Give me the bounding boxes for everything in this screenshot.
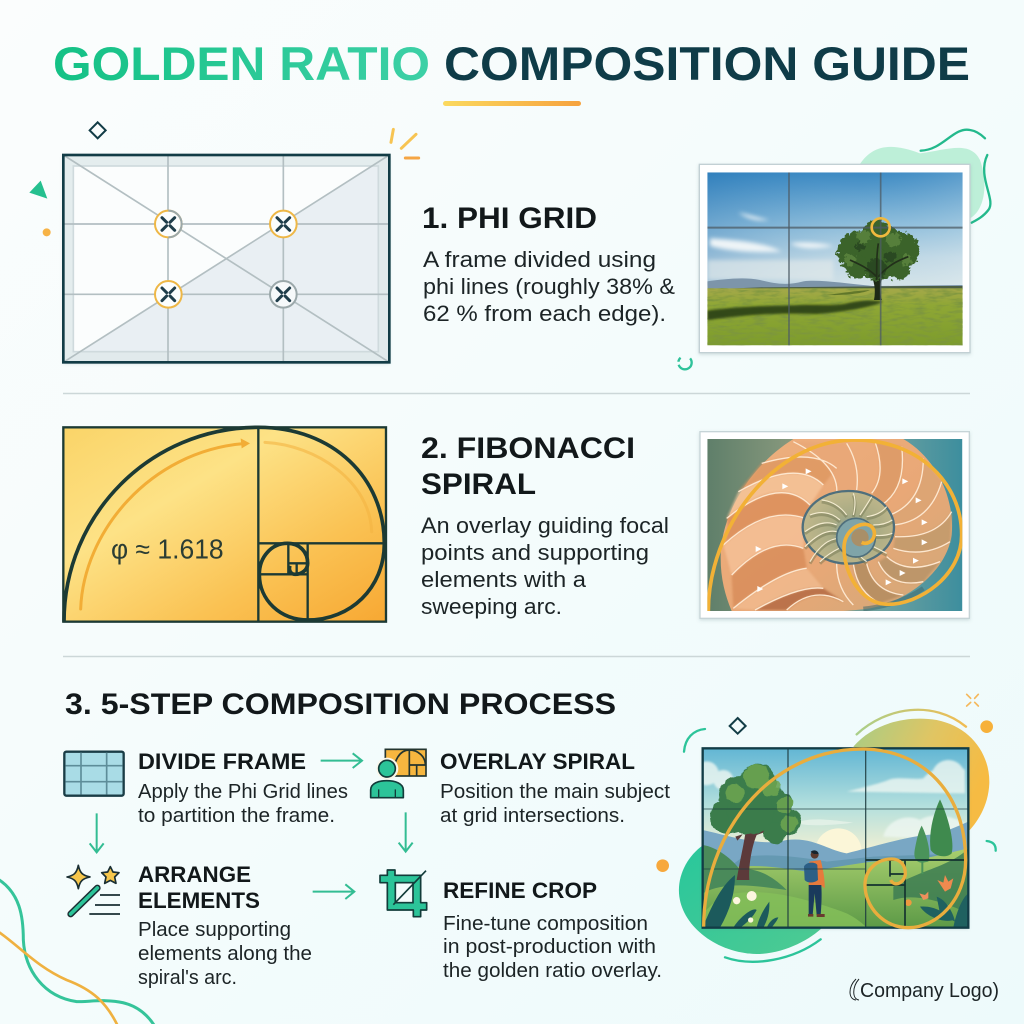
cypress trees (914, 799, 952, 874)
yellow blob (853, 719, 989, 833)
panel: illustrated landscape with spiral (656, 694, 996, 962)
grid squares (258, 427, 386, 622)
intersection marker: bottom right (270, 281, 297, 308)
text block: fibonacci spiral (421, 432, 669, 619)
text block: fibonacci spiral: elements with a (421, 567, 587, 592)
heading: process: 3. 5-STEP COMPOSITION PROCESS (65, 688, 616, 721)
foreground plants (703, 875, 968, 928)
icon: magic wand (67, 865, 120, 914)
panel: phi grid diagram (63, 155, 389, 362)
step: arrange elements (138, 862, 312, 989)
golden spiral overlay (708, 440, 962, 611)
step: arrange elements: elements along the (138, 943, 312, 965)
panel: nautilus photo with spiral (700, 432, 969, 618)
spiral overlay (704, 749, 966, 928)
arrow: divide to overlay (321, 753, 362, 768)
arrow: arrange to refine (313, 884, 354, 899)
step: refine crop (443, 878, 662, 982)
decorative curves: bottom left (0, 879, 154, 1024)
step: divide frame (138, 749, 348, 827)
step: arrange elements: ARRANGE (138, 862, 251, 887)
step: refine crop: REFINE CROP (443, 878, 597, 903)
step: arrange elements: Place supporting (138, 919, 291, 941)
green blob (679, 845, 823, 954)
step: overlay spiral (440, 749, 670, 827)
step: overlay spiral: at grid intersections. (440, 805, 625, 827)
title underline (443, 101, 581, 106)
spiral (64, 427, 384, 622)
panel: landscape photo with phi grid (676, 130, 990, 372)
tree (837, 219, 919, 300)
inner arcs (81, 438, 372, 609)
text block: fibonacci spiral: sweeping arc. (421, 594, 562, 619)
arrow: divide to arrange (90, 813, 104, 852)
icon: crop (380, 870, 427, 917)
step: refine crop: Fine-tune composition (443, 913, 648, 935)
intersection marker: top right (270, 211, 297, 237)
text block: phi grid (422, 202, 675, 326)
text block: phi grid: 62 % from each edge). (423, 301, 666, 326)
title: GOLDEN RATIO (53, 37, 430, 90)
panel: fibonacci spiral diagram (63, 427, 386, 622)
mint blob and curves (859, 130, 990, 223)
text block: fibonacci spiral: points and supporting (421, 540, 649, 565)
company logo: Company Logo) (860, 980, 999, 1002)
icon: spiral and person (371, 749, 426, 798)
step: arrange elements: spiral's arc. (138, 967, 237, 989)
person (804, 850, 825, 917)
step: refine crop: the golden ratio overlay. (443, 960, 662, 982)
tree (710, 764, 801, 880)
title: COMPOSITION GUIDE (444, 37, 970, 90)
text block: phi grid: 1. PHI GRID (422, 202, 597, 235)
text block: phi grid: phi lines (roughly 38% & (423, 274, 675, 299)
step: arrange elements: ELEMENTS (138, 888, 260, 913)
divider (63, 394, 970, 656)
loader ring (676, 353, 694, 372)
inner whorl (803, 491, 894, 564)
focal ring (872, 218, 890, 236)
icon: grid (64, 752, 124, 796)
decorative shapes: phi grid area (29, 122, 419, 236)
shell (721, 439, 952, 613)
phi label: φ ≈ 1.618 (111, 533, 224, 564)
text block: fibonacci spiral: 2. FIBONACCI (421, 432, 635, 465)
step: divide frame: Apply the Phi Grid lines (138, 781, 348, 803)
step: refine crop: in post-production with (443, 936, 656, 958)
text block: fibonacci spiral: An overlay guiding focal (421, 513, 669, 538)
arrow: overlay to refine (399, 812, 413, 852)
step: divide frame: to partition the frame. (138, 805, 335, 827)
step: divide frame: DIVIDE FRAME (138, 749, 306, 774)
decorative accents (656, 694, 996, 962)
step: overlay spiral: Position the main subject (440, 781, 670, 803)
intersection marker: top left (155, 211, 182, 237)
title (53, 37, 970, 90)
clouds (695, 760, 965, 840)
intersection marker: bottom left (155, 281, 182, 308)
step: overlay spiral: OVERLAY SPIRAL (440, 749, 635, 774)
text block: fibonacci spiral: SPIRAL (421, 468, 536, 501)
text block: phi grid: A frame divided using (423, 247, 656, 272)
